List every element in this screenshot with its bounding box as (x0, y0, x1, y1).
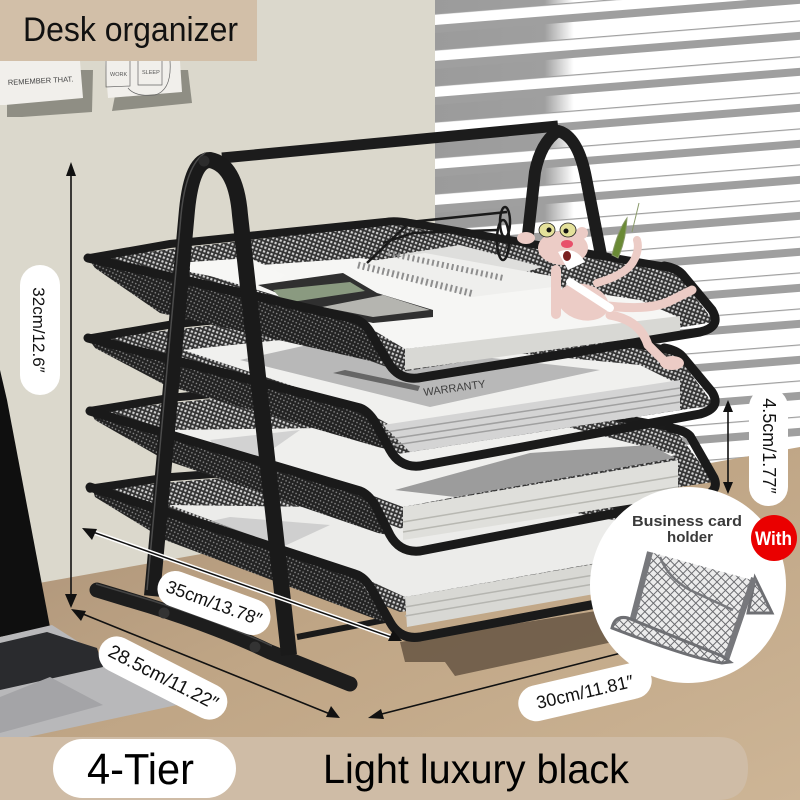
label: long side (152, 566, 276, 640)
tier pill: 4-Tier (87, 745, 194, 794)
tray 3 (90, 374, 715, 551)
label: height (20, 265, 60, 395)
wall notes: SLEEP (142, 70, 160, 76)
front mesh and rim (88, 258, 715, 378)
pink panther figure (517, 223, 692, 370)
tray 2 (88, 302, 715, 466)
label: width: 30cm/11.81″ (534, 671, 636, 713)
white block (190, 258, 285, 288)
wall notes: REMEMBER THAT. (8, 75, 74, 87)
tray 2: WARRANTY (423, 378, 487, 399)
label: height: 32cm/12.6″ (29, 287, 48, 373)
wall notes: WORK (110, 72, 127, 78)
bottom colour bar (0, 737, 748, 800)
icon: mesh card holder (612, 552, 772, 663)
label: tier gap (749, 388, 788, 506)
tier pill (53, 739, 236, 798)
arrow: width (368, 652, 625, 719)
callout: business card holder (590, 487, 786, 683)
desk shadow under organizer (400, 608, 622, 676)
laptop (0, 370, 177, 743)
label: depth: 28.5cm/11.22″ (105, 641, 222, 715)
paper on top tray (190, 258, 680, 349)
title banner (0, 0, 257, 61)
arrow: long side (82, 528, 402, 641)
base foot (96, 584, 350, 684)
arrow: depth (71, 609, 340, 718)
badge: with: With (755, 529, 792, 550)
front A-frame (147, 153, 289, 655)
title banner: Desk organizer (23, 11, 238, 49)
callout: business card holder: holder (667, 529, 713, 546)
badge: with (751, 515, 797, 561)
wall background (0, 0, 800, 600)
arrow: tier gap (723, 400, 733, 494)
label: long side: 35cm/13.78″ (163, 576, 265, 630)
arrow: height (65, 162, 77, 608)
rear arch of frame (526, 131, 601, 255)
glasses (367, 207, 510, 263)
top rail (222, 126, 558, 158)
calculator (258, 273, 433, 323)
window light and shadow stripes (435, 0, 800, 500)
wall notes (0, 61, 192, 117)
desk surface (0, 447, 800, 800)
callout: business card holder: Business card (632, 513, 742, 530)
label: tier gap: 4.5cm/1.77″ (759, 398, 779, 494)
label: width (515, 659, 655, 725)
rear foot bar (297, 620, 385, 637)
label: depth (92, 630, 234, 726)
spiral notebooks (357, 245, 557, 297)
plant leaf (612, 203, 639, 258)
top tray with desk items (88, 203, 715, 378)
colour name: Light luxury black (323, 746, 629, 792)
tray 4 (bottom) (90, 452, 714, 637)
